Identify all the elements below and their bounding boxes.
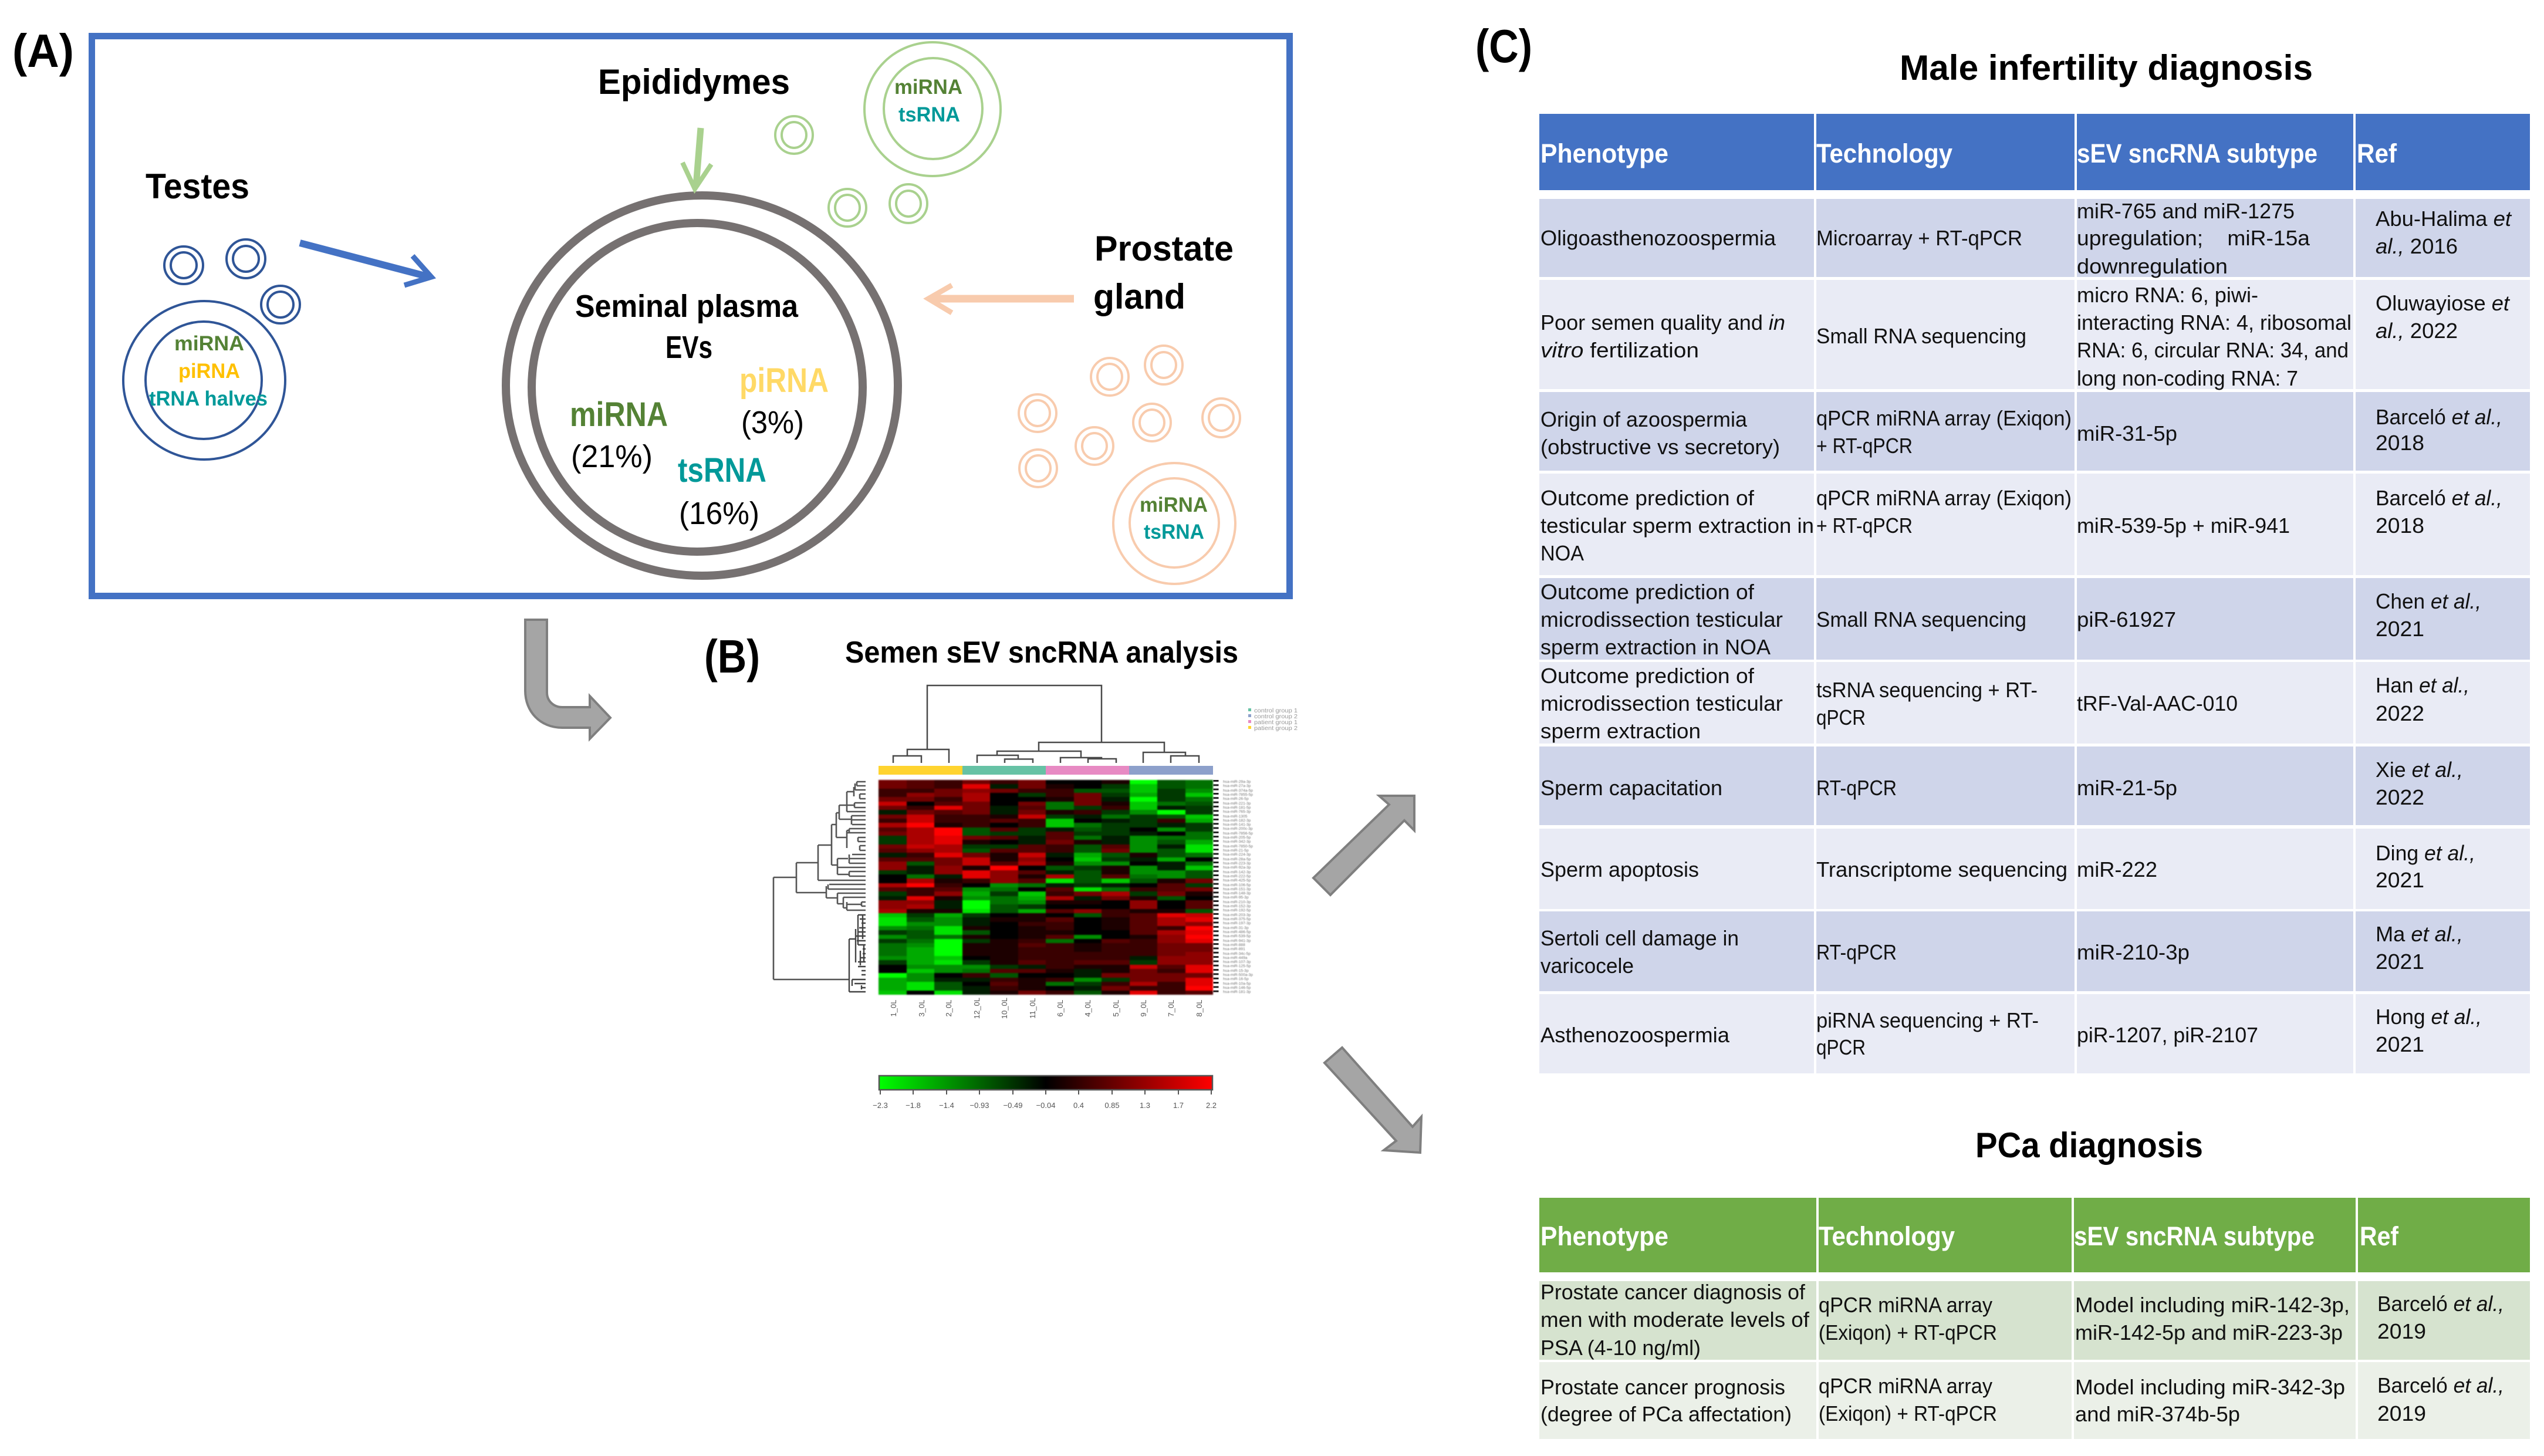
row: prostate cancer prognosis: 2019 xyxy=(2377,1401,2426,1425)
row: Sperm apoptosis: 2021 xyxy=(2376,868,2424,892)
colour scale: 1.7 xyxy=(1173,1101,1184,1110)
heading: Epididymes: Epididymes xyxy=(598,62,790,102)
row: Oligoasthenozoospermia: Oligoasthenozoospermia xyxy=(1540,226,1776,250)
central seminal plasma EV: (21%) xyxy=(571,439,653,474)
epididymes large vesicle: tsRNA xyxy=(898,103,960,126)
row dendrogram xyxy=(773,782,866,979)
central seminal plasma EV xyxy=(506,195,898,576)
heatmap row labels: hsa-miR-425-5p xyxy=(1223,879,1251,883)
row: Outcome prediction of testicular sperm extraction: + RT-qPCR xyxy=(1816,514,1913,538)
epididymes large vesicle: miRNA xyxy=(894,76,962,99)
row: Outcome prediction of microdissection in NOA: piR-61927 xyxy=(2077,607,2176,631)
header row: Phenotype xyxy=(1540,1221,1668,1251)
heatmap row labels: hsa-miR-539-5p xyxy=(1223,934,1251,938)
heatmap row labels: hsa-miR-200c-3p xyxy=(1223,827,1253,831)
prostate large vesicle xyxy=(1113,463,1235,584)
row: Sperm apoptosis: miR-222 xyxy=(2077,857,2157,881)
row: Outcome prediction of microdissection in NOA: Outcome prediction of xyxy=(1540,580,1755,604)
prostate large vesicle: miRNA xyxy=(1140,494,1208,516)
label: panel A: (A) xyxy=(12,25,74,77)
heatmap row labels: hsa-miR-205-5p xyxy=(1223,836,1251,840)
sample labels: 1_0L xyxy=(889,1000,898,1016)
heading: PCa diagnosis: PCa diagnosis xyxy=(1975,1126,2203,1165)
heatmap row labels: hsa-miR-146-5p xyxy=(1223,986,1251,990)
row: Sperm apoptosis xyxy=(1540,841,2475,892)
sample labels: 8_0L xyxy=(1195,1000,1204,1016)
row: Sertoli cell damage: miR-210-3p xyxy=(2077,940,2190,964)
row: prostate cancer diagnosis: men with moderate levels of xyxy=(1540,1308,1810,1332)
row: Sertoli cell damage: RT-qPCR xyxy=(1816,940,1897,964)
row: Outcome prediction of testicular sperm extraction: qPCR miRNA array (Exiqon) xyxy=(1816,486,2072,510)
row: Oligoasthenozoospermia: Microarray + RT-qPCR xyxy=(1816,226,2022,250)
heatmap row labels: hsa-miR-16-5p xyxy=(1223,977,1249,981)
heading: Male infertility diagnosis: Male infertility diagnosis xyxy=(1900,48,2313,87)
row: Poor semen quality xyxy=(1540,283,2511,390)
row: prostate cancer prognosis: and miR-374b-5p xyxy=(2075,1402,2240,1426)
heatmap row labels: hsa-miR-891 xyxy=(1223,947,1245,951)
row: Origin of azoospermia: 2018 xyxy=(2376,431,2424,455)
row tick marks xyxy=(1214,780,1218,995)
label: panel C: (C) xyxy=(1475,20,1532,72)
arrow: up-right to panel C xyxy=(1313,796,1414,895)
row: Oligoasthenozoospermia xyxy=(1540,199,2512,278)
heatmap row labels: hsa-miR-765-3p xyxy=(1223,810,1251,814)
row: Poor semen quality: micro RNA: 6, piwi- xyxy=(2077,283,2258,307)
row: prostate cancer prognosis: Barceló et al., xyxy=(2377,1373,2504,1397)
row: Poor semen quality: Oluwayiose et xyxy=(2376,291,2511,315)
row: Outcome prediction of testicular sperm extraction: NOA xyxy=(1540,541,1584,565)
colour scale: 0.4 xyxy=(1073,1101,1084,1110)
heading: Semen sEV sncRNA analysis: Semen sEV sncRNA analysis xyxy=(845,636,1238,670)
heatmap row labels: hsa-miR-7856-5p xyxy=(1223,832,1253,836)
sample labels: 7_0L xyxy=(1167,1000,1175,1016)
row: Asthenozoospermia: piR-1207, piR-2107 xyxy=(2077,1023,2258,1047)
sample labels: 5_0L xyxy=(1111,1000,1120,1016)
central seminal plasma EV: miRNA xyxy=(570,396,668,434)
header row: Ref xyxy=(2357,138,2397,168)
heatmap row labels: hsa-miR-1305 xyxy=(1223,815,1247,818)
colour scale: 2.2 xyxy=(1206,1101,1217,1110)
row: prostate cancer diagnosis: PSA (4-10 ng/ml) xyxy=(1540,1336,1701,1360)
header row: Technology xyxy=(1819,1221,1955,1251)
sample labels: 10_0L xyxy=(1000,998,1009,1019)
table: PCa diagnosis xyxy=(1539,1198,2530,1439)
heading: Prostate gland xyxy=(1093,229,1234,316)
row: Outcome prediction of microdissection in NOA: 2021 xyxy=(2376,617,2424,641)
row: Outcome prediction of microdissection in NOA xyxy=(1540,580,2481,659)
heatmap legend: patient group 2 xyxy=(1254,725,1298,732)
sample labels: 4_0L xyxy=(1083,1000,1092,1016)
arrow: testes to EV xyxy=(300,243,431,285)
heatmap row labels: hsa-miR-486-5p xyxy=(1223,930,1251,934)
row: Outcome prediction of microdissection: 2022 xyxy=(2376,701,2424,725)
heatmap row labels: hsa-miR-221-3p xyxy=(1223,802,1251,806)
row: Outcome prediction of microdissection: microdissection testicular xyxy=(1540,691,1783,715)
heatmap legend xyxy=(1248,708,1298,732)
row: prostate cancer diagnosis: (Exiqon) + RT-qPCR xyxy=(1819,1320,1997,1344)
heatmap row labels: hsa-miR-15-3p xyxy=(1223,969,1249,973)
heatmap legend: control group 2 xyxy=(1254,714,1298,720)
row: Outcome prediction of microdissection in NOA: sperm extraction in NOA xyxy=(1540,635,1771,659)
colour scale xyxy=(873,1076,1217,1110)
row: Origin of azoospermia: (obstructive vs secretory) xyxy=(1540,435,1780,459)
row: Sperm capacitation: Sperm capacitation xyxy=(1540,776,1722,800)
heatmap row labels: hsa-miR-941-3p xyxy=(1223,939,1251,943)
row: prostate cancer diagnosis: Model including miR-142-3p, xyxy=(2075,1293,2350,1317)
epididymes large vesicle xyxy=(864,42,1001,176)
heatmap row labels: hsa-miR-888 xyxy=(1223,943,1245,947)
row: Poor semen quality: long non-coding RNA: 7 xyxy=(2077,366,2298,390)
heatmap row labels: hsa-miR-26-5p xyxy=(1223,797,1249,801)
testes large vesicle: tRNA halves xyxy=(149,387,268,410)
table backgrounds xyxy=(1539,1198,2530,1439)
row: Outcome prediction of microdissection in NOA: microdissection testicular xyxy=(1540,607,1783,631)
row: Sertoli cell damage: 2021 xyxy=(2376,950,2424,974)
row: prostate cancer prognosis: Model including miR-342-3p xyxy=(2075,1375,2345,1399)
row: Outcome prediction of microdissection: tRF-Val-AAC-010 xyxy=(2077,691,2238,715)
heatmap row labels: hsa-miR-7850-5p xyxy=(1223,844,1253,849)
row: Outcome prediction of microdissection: tsRNA sequencing + RT- xyxy=(1816,678,2038,702)
row: Sperm capacitation: RT-qPCR xyxy=(1816,776,1897,800)
sample labels: 9_0L xyxy=(1139,1000,1148,1016)
row: Sperm capacitation: Xie et al., xyxy=(2376,758,2463,782)
row: prostate cancer diagnosis xyxy=(1540,1280,2504,1360)
row: Asthenozoospermia: Asthenozoospermia xyxy=(1540,1023,1730,1047)
heading: Testes: Testes xyxy=(146,167,249,206)
table: male infertility diagnosis xyxy=(1539,114,2530,1073)
row: Poor semen quality: al., 2022 xyxy=(2376,319,2458,343)
row: Asthenozoospermia xyxy=(1540,1005,2482,1059)
row: Oligoasthenozoospermia: miR-765 and miR-1275 xyxy=(2077,199,2295,223)
central seminal plasma EV: Seminal plasma xyxy=(575,289,799,324)
header row xyxy=(1540,138,2397,168)
colour scale: −0.04 xyxy=(1036,1101,1055,1110)
colour scale: −0.93 xyxy=(970,1101,989,1110)
heatmap row labels: hsa-miR-151-3p xyxy=(1223,887,1251,891)
row: Poor semen quality: interacting RNA: 4, ribosomal xyxy=(2077,310,2352,335)
heatmap row labels: hsa-miR-142-3p xyxy=(1223,870,1251,874)
heatmap legend: control group 1 xyxy=(1254,708,1298,714)
sample labels: 12_0L xyxy=(972,998,981,1019)
row: Sertoli cell damage: varicocele xyxy=(1540,954,1634,978)
row: prostate cancer diagnosis: qPCR miRNA array xyxy=(1819,1293,1992,1317)
heatmap row labels xyxy=(1223,779,1254,994)
row: Origin of azoospermia: miR-31-5p xyxy=(2077,421,2177,445)
heatmap row labels: hsa-miR-203-3p xyxy=(1223,913,1251,917)
heatmap row labels: hsa-miR-21-5p xyxy=(1223,849,1249,853)
heatmap row labels: hsa-miR-374a-5p xyxy=(1223,789,1253,793)
row: Outcome prediction of microdissection xyxy=(1540,664,2469,743)
row: Oligoasthenozoospermia: Abu-Halima et xyxy=(2376,207,2512,231)
row: Outcome prediction of microdissection: Han et al., xyxy=(2376,673,2469,697)
row: prostate cancer diagnosis: miR-142-5p and miR-223-3p xyxy=(2075,1320,2343,1344)
label: panel B: (B) xyxy=(704,630,760,683)
central seminal plasma EV: (16%) xyxy=(679,496,759,531)
heatmap row labels: hsa-miR-375-5p xyxy=(1223,917,1251,921)
heatmap row labels: hsa-miR-10a-5p xyxy=(1223,982,1251,986)
row: Oligoasthenozoospermia: al., 2016 xyxy=(2376,234,2458,258)
central seminal plasma EV: (3%) xyxy=(741,405,804,440)
row: Outcome prediction of microdissection in NOA: Small RNA sequencing xyxy=(1816,607,2026,631)
heatmap row labels: hsa-miR-28a-5p xyxy=(1223,857,1251,862)
colour scale: −2.3 xyxy=(873,1101,888,1110)
panel A: seminal plasma EV sources xyxy=(92,36,1290,596)
row: Origin of azoospermia xyxy=(1540,405,2502,459)
row: Outcome prediction of microdissection: qPCR xyxy=(1816,705,1866,729)
heatmap row labels: hsa-miR-500a-3p xyxy=(1223,973,1253,977)
central seminal plasma EV: EVs xyxy=(665,330,712,365)
row: Outcome prediction of microdissection: Outcome prediction of xyxy=(1540,664,1755,688)
row: Sperm apoptosis: Sperm apoptosis xyxy=(1540,857,1699,881)
sample labels: 3_0L xyxy=(917,1000,926,1016)
heatmap row labels: hsa-miR-27a-3p xyxy=(1223,784,1251,788)
heatmap row labels: hsa-miR-224-3p xyxy=(1223,853,1251,857)
row: prostate cancer prognosis: (Exiqon) + RT-qPCR xyxy=(1819,1401,1997,1425)
arrow: down-right to panel C xyxy=(1325,1048,1421,1153)
row: Poor semen quality: RNA: 6, circular RNA: 34, and xyxy=(2077,338,2349,362)
sample labels: 11_0L xyxy=(1028,998,1037,1019)
heatmap row labels: hsa-miR-34c-5p xyxy=(1223,952,1251,955)
heatmap row labels: hsa-miR-125-5p xyxy=(1223,964,1251,968)
heatmap row labels: hsa-miR-107-3p xyxy=(1223,960,1251,964)
row: prostate cancer prognosis: qPCR miRNA array xyxy=(1819,1374,1992,1398)
sample labels xyxy=(889,998,1204,1019)
testes large vesicle: miRNA xyxy=(174,332,244,355)
header row xyxy=(1540,1221,2399,1251)
heatmap row labels: hsa-miR-449a xyxy=(1223,956,1247,960)
arrow: epididymes to EV xyxy=(683,128,711,189)
heatmap xyxy=(877,779,1214,996)
heatmap row labels: hsa-miR-210-3p xyxy=(1223,900,1251,904)
testes large vesicle: piRNA xyxy=(178,360,240,383)
row: Sperm capacitation: 2022 xyxy=(2376,785,2424,809)
heatmap row labels: hsa-miR-197-3p xyxy=(1223,921,1251,925)
heading: Prostate gland: Prostate xyxy=(1094,229,1234,268)
colour scale: −1.4 xyxy=(939,1101,954,1110)
row dendrogram: lower cluster xyxy=(849,915,866,992)
colour scale: 0.85 xyxy=(1104,1101,1120,1110)
row: Outcome prediction of microdissection: sperm extraction xyxy=(1540,719,1701,743)
heatmap row labels: hsa-miR-106-5p xyxy=(1223,883,1251,887)
row: Oligoasthenozoospermia: downregulation xyxy=(2077,254,2228,278)
heading: Prostate gland: gland xyxy=(1093,277,1185,316)
row: Outcome prediction of microdissection in NOA: Chen et al., xyxy=(2376,589,2481,613)
prostate vesicles xyxy=(1019,346,1240,487)
row: Asthenozoospermia: qPCR xyxy=(1816,1035,1866,1059)
arrow: prostate to EV xyxy=(928,285,1074,313)
header row: Phenotype xyxy=(1540,138,1668,168)
heatmap row labels: hsa-miR-95-3p xyxy=(1223,896,1249,900)
header row: sEV sncRNA subtype xyxy=(2074,1221,2315,1251)
row: prostate cancer prognosis: Prostate cancer prognosis xyxy=(1540,1375,1785,1399)
heatmap row labels: hsa-miR-192-5p xyxy=(1223,908,1251,913)
sample group colour bar xyxy=(879,766,1213,775)
sample labels: 6_0L xyxy=(1056,1000,1065,1016)
row: Sperm capacitation: miR-21-5p xyxy=(2077,776,2177,800)
row: Outcome prediction of testicular sperm extraction: testicular sperm extraction in xyxy=(1540,514,1814,538)
prostate large vesicle: tsRNA xyxy=(1144,521,1204,543)
panel border xyxy=(92,36,1290,596)
row: Asthenozoospermia: Hong et al., xyxy=(2376,1005,2482,1029)
heatmap row labels: hsa-miR-152-3p xyxy=(1223,904,1251,908)
row: Oligoasthenozoospermia: upregulation; miR-15a xyxy=(2077,226,2310,250)
elbow arrow: panel A to panel B xyxy=(525,620,610,739)
central seminal plasma EV: piRNA xyxy=(739,362,829,400)
table backgrounds xyxy=(1539,114,2530,1073)
heatmap row labels: hsa-miR-29a-3p xyxy=(1223,780,1251,784)
heatmap row labels: hsa-miR-181-5p xyxy=(1223,806,1251,810)
heatmap row labels: hsa-miR-222-5p xyxy=(1223,874,1251,879)
row: Origin of azoospermia: + RT-qPCR xyxy=(1816,434,1913,458)
heatmap row labels: hsa-miR-31-3p xyxy=(1223,926,1249,930)
row: Sperm apoptosis: Ding et al., xyxy=(2376,841,2475,865)
row: Origin of azoospermia: qPCR miRNA array (Exiqon) xyxy=(1816,406,2072,430)
row: Asthenozoospermia: piRNA sequencing + RT- xyxy=(1816,1008,2039,1032)
row: Poor semen quality: Small RNA sequencing xyxy=(1816,324,2026,348)
heatmap row labels: hsa-miR-223-3p xyxy=(1223,862,1251,866)
heatmap row labels: hsa-miR-141-3p xyxy=(1223,823,1251,827)
row: Outcome prediction of testicular sperm extraction xyxy=(1540,486,2502,565)
row: Outcome prediction of testicular sperm extraction: Outcome prediction of xyxy=(1540,486,1755,510)
row: prostate cancer prognosis xyxy=(1540,1373,2504,1426)
heatmap row labels: hsa-miR-342-3p xyxy=(1223,840,1251,844)
row: Poor semen quality: Poor semen quality and in xyxy=(1540,310,1785,335)
sample labels: 2_0L xyxy=(944,1000,953,1016)
header row: sEV sncRNA subtype xyxy=(2077,138,2317,168)
row: Asthenozoospermia: 2021 xyxy=(2376,1032,2424,1056)
testes large vesicle xyxy=(123,301,285,460)
testes vesicles xyxy=(164,239,300,323)
row: Sperm apoptosis: Transcriptome sequencing xyxy=(1816,857,2067,881)
colour scale: 1.3 xyxy=(1140,1101,1150,1110)
heatmap row labels: hsa-miR-148-3p xyxy=(1223,891,1251,896)
heatmap row labels: hsa-miR-182-3p xyxy=(1223,819,1251,823)
heatmap row labels: hsa-miR-92a-3p xyxy=(1223,866,1251,870)
row: Outcome prediction of testicular sperm extraction: 2018 xyxy=(2376,514,2424,538)
row: prostate cancer diagnosis: 2019 xyxy=(2377,1319,2426,1343)
row: Outcome prediction of testicular sperm extraction: Barceló et al., xyxy=(2376,486,2502,510)
row: Poor semen quality: vitro fertilization xyxy=(1540,338,1699,362)
heatmap legend: patient group 1 xyxy=(1254,719,1298,726)
epididymes vesicles xyxy=(775,116,927,227)
colour scale: −0.49 xyxy=(1004,1101,1022,1110)
row: Sperm capacitation xyxy=(1540,758,2463,809)
central seminal plasma EV: tsRNA xyxy=(678,451,766,489)
header row: Technology xyxy=(1816,138,1952,168)
row: Sertoli cell damage: Sertoli cell damage in xyxy=(1540,926,1739,950)
row: Outcome prediction of testicular sperm extraction: miR-539-5p + miR-941 xyxy=(2077,514,2290,538)
row: Sertoli cell damage xyxy=(1540,922,2463,978)
row: Sertoli cell damage: Ma et al., xyxy=(2376,922,2463,946)
row: Origin of azoospermia: Origin of azoospermia xyxy=(1540,407,1748,431)
header row: Ref xyxy=(2360,1221,2399,1251)
heatmap row labels: hsa-miR-7855-5p xyxy=(1223,793,1253,797)
column dendrogram xyxy=(893,685,1199,763)
row: prostate cancer prognosis: (degree of PCa affectation) xyxy=(1540,1402,1792,1426)
row: Origin of azoospermia: Barceló et al., xyxy=(2376,405,2502,429)
colour scale: −1.8 xyxy=(906,1101,921,1110)
row: prostate cancer diagnosis: Prostate cancer diagnosis of xyxy=(1540,1280,1806,1304)
heatmap row labels: hsa-miR-181-3p xyxy=(1223,990,1251,994)
row: prostate cancer diagnosis: Barceló et al., xyxy=(2377,1292,2504,1316)
